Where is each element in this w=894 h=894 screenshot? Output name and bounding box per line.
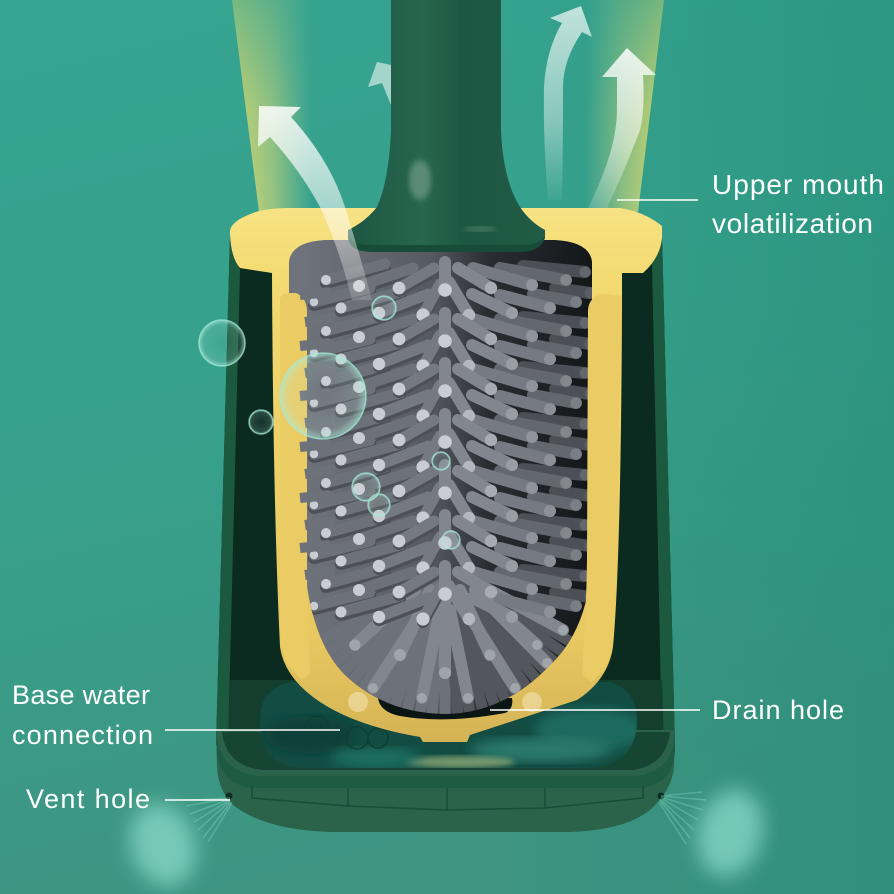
label: base water connection: connection (12, 720, 153, 750)
handle and collar (348, 0, 545, 252)
near left bristles (373, 268, 440, 626)
leader line: vent hole (165, 799, 230, 801)
label: upper mouth volatilization (712, 169, 884, 239)
label: base water connection (12, 680, 153, 750)
drip tray base (216, 730, 675, 832)
arrow: tall back (544, 6, 592, 200)
silicone bristles (310, 262, 596, 715)
label: drain hole: Drain hole (712, 695, 844, 725)
left yellow vapor beam (232, 0, 308, 211)
arrow: far left (258, 106, 372, 300)
label: upper mouth volatilization: volatilization (712, 208, 873, 239)
water droplets on cup (348, 692, 542, 712)
leader line: upper mouth (617, 199, 698, 201)
bubbles (199, 296, 460, 549)
right vent spray (659, 782, 772, 884)
vapor arrows (258, 6, 656, 300)
right yellow vapor beam (588, 0, 664, 212)
drain slot (378, 698, 512, 719)
mid right bristles (500, 268, 582, 612)
bristle tips over liner (300, 292, 335, 575)
far left bristles (310, 264, 413, 618)
yellow inner cup (230, 208, 662, 742)
green housing (216, 236, 675, 745)
arrow: right front (588, 48, 656, 208)
left vent spray (120, 795, 232, 894)
yellow side liners (280, 293, 622, 682)
near right bristles (473, 268, 556, 618)
brush dark back (289, 240, 592, 714)
far right bristles (523, 266, 596, 602)
label: vent hole: Vent hole (26, 784, 150, 814)
water in base (255, 680, 645, 772)
leader line: base water (165, 729, 340, 731)
label: base water connection: Base water (12, 680, 150, 710)
arrow: small back (368, 62, 391, 105)
label: upper mouth volatilization: Upper mouth (712, 169, 884, 200)
bottom bristle fan (319, 570, 571, 715)
centre spine bristles (438, 262, 518, 625)
leader line: drain hole (490, 709, 700, 711)
